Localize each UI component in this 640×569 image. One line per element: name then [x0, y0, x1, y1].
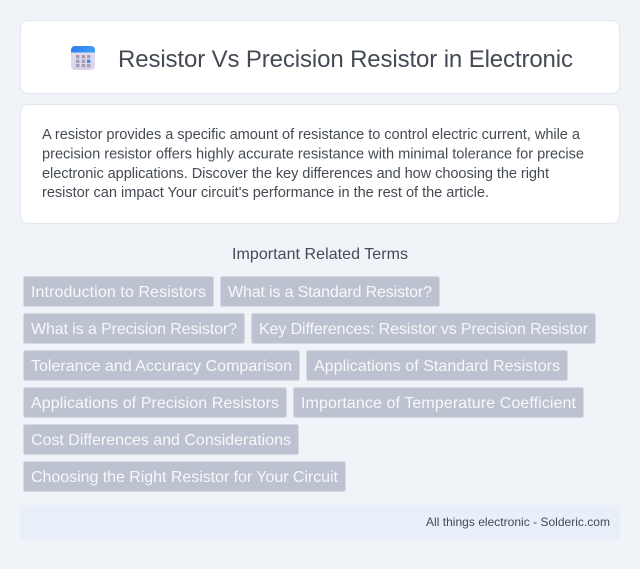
panel: description	[20, 104, 620, 224]
tag: precision resistor	[24, 314, 244, 344]
tag: key differences: Key Differences: Resistor vs Precision Resistor	[259, 321, 589, 338]
footer	[20, 505, 620, 539]
panel: title card	[20, 20, 620, 94]
title: Resistor Vs Precision Resistor in Electronic	[118, 46, 573, 73]
icon: calendar	[71, 46, 95, 70]
tag: temperature coefficient: Importance of Temperature Coefficient	[301, 395, 577, 412]
tag: key differences	[252, 314, 596, 344]
tag: tolerance: Tolerance and Accuracy Comparison	[31, 358, 292, 375]
tag: precision applications	[24, 388, 286, 418]
text block: description: electronic applications. Discover the key differences and how choosing the right	[42, 166, 549, 182]
tag: choosing	[24, 462, 346, 492]
tag: choosing: Choosing the Right Resistor for Your Circuit	[31, 469, 339, 486]
tag: tolerance	[24, 350, 300, 380]
tag: precision applications: Applications of Precision Resistors	[31, 395, 279, 412]
text block: description: A resistor provides a specific amount of resistance to control electric current, while a	[42, 127, 581, 143]
tag: introduction: Introduction to Resistors	[31, 284, 206, 301]
text block: description	[42, 127, 584, 201]
tag: standard applications: Applications of Standard Resistors	[314, 358, 560, 375]
footer: All things electronic - Solderic.com	[426, 515, 610, 529]
text block: description: resistor can impact Your circuit's performance in the rest of the article.	[42, 185, 489, 201]
tag: temperature coefficient	[294, 388, 584, 418]
text block: description: precision resistor offers highly accurate resistance with minimal tolerance for precise	[42, 146, 584, 162]
tag: standard applications	[306, 350, 568, 380]
tag: precision resistor: What is a Precision Resistor?	[31, 321, 237, 338]
tag: cost	[24, 424, 298, 454]
tag: standard resistor: What is a Standard Resistor?	[228, 284, 432, 301]
tag: standard resistor	[220, 276, 440, 306]
tag list	[24, 276, 596, 492]
tag: cost: Cost Differences and Considerations	[31, 432, 291, 449]
heading: related terms: Important Related Terms	[232, 246, 408, 263]
tag: introduction	[24, 276, 214, 306]
